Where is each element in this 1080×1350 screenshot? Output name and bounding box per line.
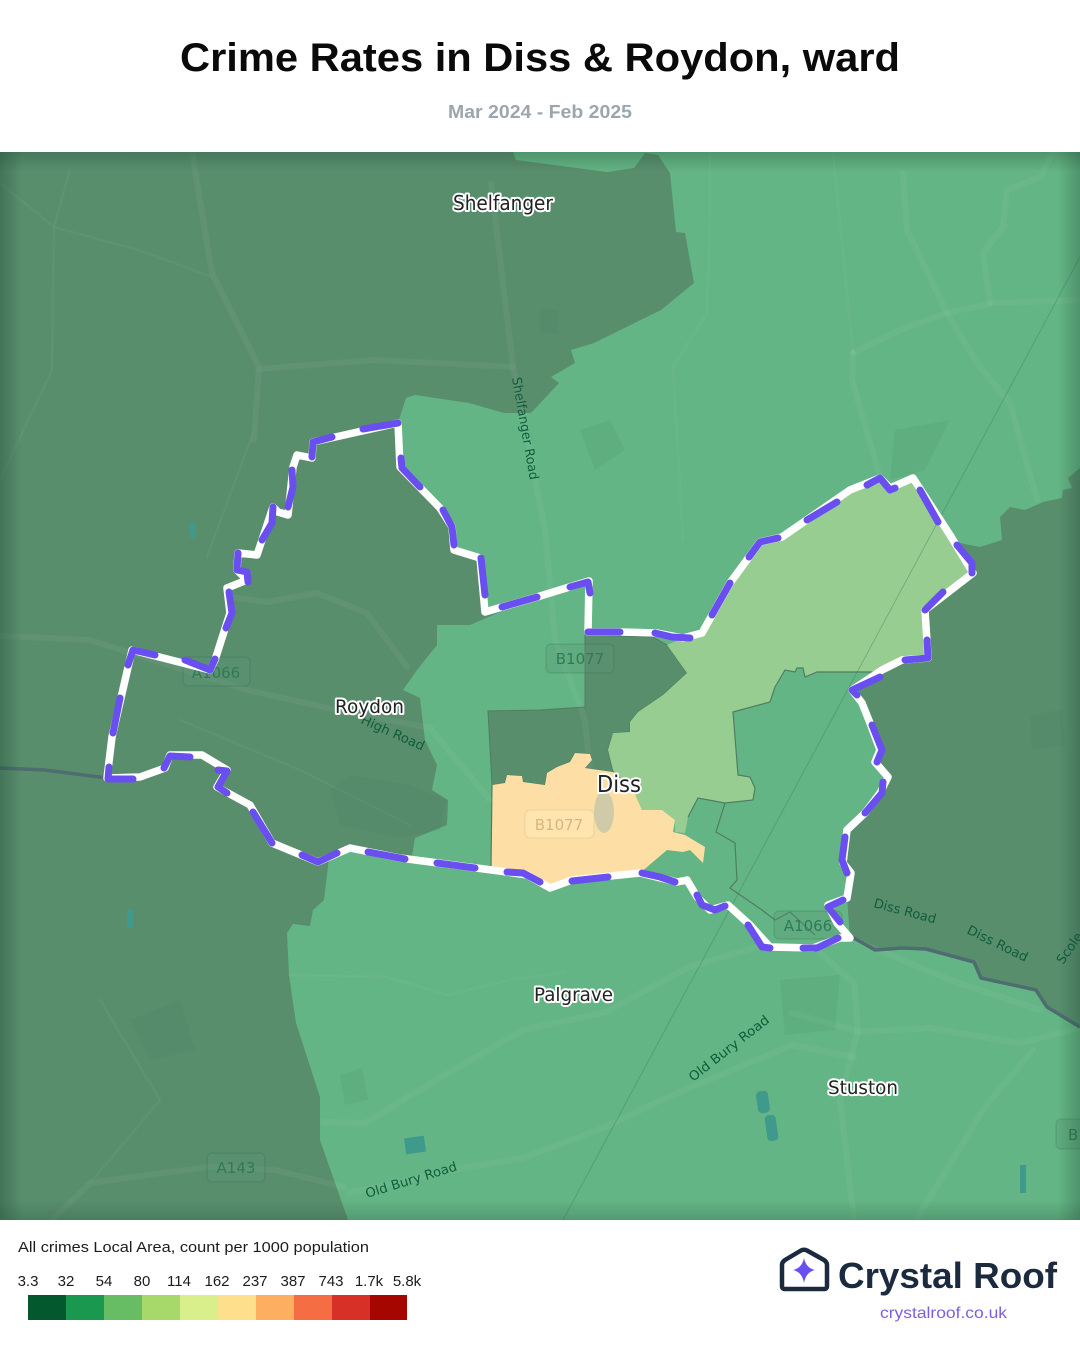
logo url: crystalroof.co.uk (880, 1305, 1008, 1322)
road shield: clipped east (1056, 1119, 1080, 1149)
logo wordmark: Crystal Roof (838, 1255, 1058, 1296)
road shield: A1066 east (774, 911, 842, 939)
lake in Diss (594, 791, 614, 833)
road shield: B1077 south: B1077 (535, 816, 583, 834)
area: eastern dark green ward (843, 468, 1080, 1025)
road network (53, 226, 993, 1184)
legend scale labels: 54 (96, 1273, 112, 1290)
place label: Roydon: Roydon (335, 696, 404, 718)
road shield: A1066 east: A1066 (784, 917, 832, 935)
area: peach high-crime ward (491, 753, 705, 888)
road label: Diss Road 1: Diss Road (872, 896, 938, 927)
river (0, 768, 1080, 1027)
road shield: A143 (207, 1153, 265, 1182)
legend colour scale (28, 1295, 407, 1320)
power line (563, 257, 1080, 1220)
place label: Stuston: Stuston (828, 1077, 898, 1099)
subtitle: date range: Mar 2024 - Feb 2025 (448, 102, 632, 122)
road shield: A1066 west: A1066 (192, 664, 240, 682)
road label: Shelfanger Road: Shelfanger Road (508, 376, 541, 481)
place label: Palgrave: Palgrave (534, 984, 613, 1006)
road shield: A1066 west (183, 657, 250, 686)
legend scale labels: 387 (280, 1273, 306, 1290)
legend scale labels: 1.7k (355, 1273, 384, 1290)
road shield: A143: A143 (217, 1159, 255, 1177)
road label: Diss Road 2: Diss Road (964, 923, 1030, 966)
logo icon: house with star (782, 1250, 827, 1289)
legend scale labels: 162 (204, 1273, 230, 1290)
woodland and field blocks (130, 310, 1065, 1105)
legend scale labels (18, 1273, 422, 1290)
area: light green ward (608, 478, 973, 833)
water bodies (127, 522, 1026, 1193)
road shield: B1077 south (525, 810, 594, 838)
legend scale labels: 237 (242, 1273, 268, 1290)
road shield: B1077 north (546, 644, 614, 673)
area outlines (491, 668, 880, 935)
legend scale labels: 80 (134, 1273, 150, 1290)
legend title: All crimes Local Area, count per 1000 population (18, 1239, 369, 1256)
title: Crime Rates in Diss & Roydon, ward (180, 36, 900, 80)
place label: Shelfanger: Shelfanger (453, 191, 554, 215)
map panel (0, 152, 1080, 1220)
map edge vignette (0, 152, 1080, 1220)
road label: High Road: High Road (358, 713, 427, 754)
legend scale labels: 743 (318, 1273, 344, 1290)
area: central dark green ward (488, 635, 687, 785)
road shield: B1077 north: B1077 (556, 650, 604, 668)
road label: Old Bury Road west: Old Bury Road (364, 1160, 459, 1202)
legend scale labels: 114 (167, 1273, 191, 1290)
legend scale labels: 32 (58, 1273, 74, 1290)
legend scale labels: 3.3 (18, 1273, 38, 1290)
area: western dark green ward (0, 152, 694, 1220)
ward boundary: white line with purple dashes (107, 423, 973, 948)
place label: Diss: Diss (597, 772, 641, 798)
legend scale labels: 5.8k (393, 1273, 422, 1290)
road label: Old Bury Road east: Old Bury Road (686, 1013, 773, 1085)
base area: mid green (287, 152, 1080, 1220)
